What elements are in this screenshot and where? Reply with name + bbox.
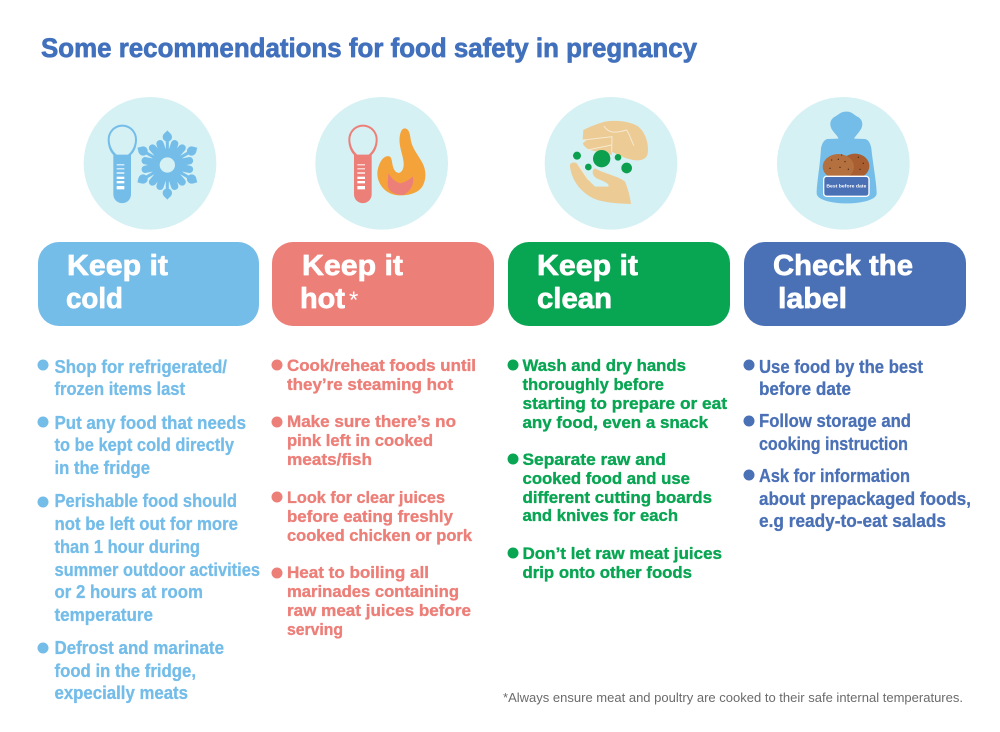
list: check the label [744, 357, 971, 531]
list: keep it cold: not be left out for more [54, 514, 238, 534]
header: Keep it cold [38, 242, 259, 326]
list: keep it cold [38, 357, 260, 703]
header: Keep it hot: hot [300, 283, 345, 315]
list: check the label: cooking instruction [759, 434, 908, 454]
list: keep it hot: marinades containing [287, 583, 459, 601]
list: keep it cold: food in the fridge, [54, 661, 196, 681]
list: keep it hot: raw meat juices before [287, 602, 471, 620]
list: keep it hot: pink left in cooked [287, 432, 433, 450]
list: keep it cold: Defrost and marinate [54, 638, 224, 658]
list: keep it hot: Make sure there’s no [287, 413, 456, 431]
list: keep it clean: Separate raw and [522, 451, 666, 469]
list: keep it hot: Heat to boiling all [287, 564, 429, 582]
list: check the label: Use food by the best [759, 357, 923, 377]
footnote: *Always ensure meat and poultry are cooked to their safe internal temperatures. [503, 691, 963, 705]
header: Keep it hot: * [349, 287, 358, 314]
list: keep it hot [272, 357, 476, 639]
header: Keep it clean [508, 242, 730, 326]
list: keep it cold: expecially meats [54, 683, 188, 703]
header: Check the label: label [778, 283, 847, 315]
list: keep it hot: serving [287, 621, 343, 639]
header: Keep it hot [272, 242, 494, 326]
header: Check the label [744, 242, 966, 326]
list: keep it cold: in the fridge [54, 458, 150, 478]
list: keep it cold: to be kept cold directly [54, 435, 234, 455]
header: Keep it cold: Keep it [67, 250, 168, 282]
icon: thermometer and flame [315, 97, 448, 230]
list: keep it hot: meats/fish [287, 451, 372, 469]
header: Keep it clean: Keep it [537, 250, 638, 282]
icon: thermometer and snowflake [84, 97, 216, 230]
header: Check the label: Check the [773, 250, 913, 282]
list: keep it hot: they’re steaming hot [287, 376, 454, 394]
list: keep it cold: frozen items last [54, 379, 185, 399]
list: keep it cold: than 1 hour during [54, 537, 200, 557]
list: check the label: before date [759, 379, 851, 399]
list: keep it clean: Wash and dry hands [522, 357, 686, 375]
list: check the label: about prepackaged foods, [759, 489, 971, 509]
header: Keep it clean: clean [537, 283, 612, 315]
list: keep it clean: different cutting boards [522, 489, 712, 507]
list: check the label: Follow storage and [759, 411, 911, 431]
list: check the label: Ask for information [759, 466, 910, 486]
list: keep it clean: and knives for each [522, 507, 678, 525]
title: Some recommendations for food safety in pregnancy [41, 33, 697, 63]
list: keep it clean: Don’t let raw meat juices [522, 545, 722, 563]
list: keep it cold: or 2 hours at room [54, 582, 203, 602]
list: keep it hot: Cook/reheat foods until [287, 357, 476, 375]
list: keep it cold: temperature [54, 605, 153, 625]
list: keep it clean: starting to prepare or eat [522, 395, 728, 413]
icon: food bag with best before label: Best before date [826, 184, 867, 190]
list: keep it clean: drip onto other foods [522, 564, 692, 582]
header: Keep it hot: Keep it [302, 250, 403, 282]
list: keep it clean [508, 357, 728, 582]
list: keep it clean: thoroughly before [522, 376, 664, 394]
list: keep it cold: Shop for refrigerated/ [54, 357, 227, 377]
list: keep it clean: cooked food and use [522, 470, 690, 488]
list: keep it hot: cooked chicken or pork [287, 527, 473, 545]
list: keep it cold: Put any food that needs [54, 413, 246, 433]
icon: food bag with best before label [777, 97, 910, 230]
list: keep it cold: summer outdoor activities [54, 560, 260, 580]
list: keep it cold: Perishable food should [54, 491, 237, 511]
list: keep it clean: any food, even a snack [522, 414, 709, 432]
icon: hands and germs [545, 97, 677, 230]
list: check the label: e.g ready-to-eat salads [759, 511, 946, 531]
list: keep it hot: before eating freshly [287, 508, 454, 526]
header: Keep it cold: cold [66, 283, 123, 315]
list: keep it hot: Look for clear juices [287, 489, 445, 507]
